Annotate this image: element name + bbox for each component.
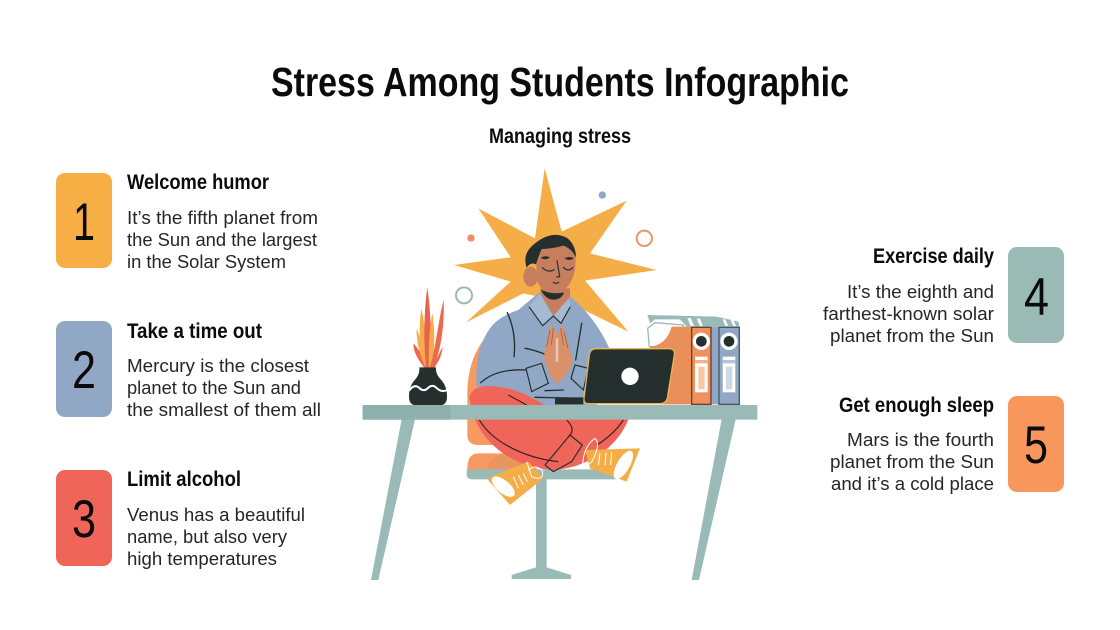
right shoe [583, 438, 640, 482]
beard [541, 290, 564, 300]
shirt lines [481, 313, 582, 398]
number card 5 [1008, 396, 1064, 492]
cuffs [526, 363, 548, 392]
laptop [555, 349, 674, 404]
plant in vase [409, 287, 447, 405]
number card 5: 5 [1024, 416, 1048, 475]
ear [523, 267, 538, 287]
head [523, 235, 576, 300]
hair [525, 235, 576, 268]
person [469, 235, 640, 505]
subtitle: Managing stress [489, 125, 631, 148]
text: take a time out: planet to the Sun and [127, 377, 301, 398]
text: limit alcohol: high temperatures [127, 548, 277, 569]
text: welcome humor: the Sun and the largest [127, 229, 317, 250]
icon: starburst [454, 168, 657, 332]
number card 2: 2 [72, 341, 96, 400]
text: exercise daily: farthest-known solar [823, 303, 994, 324]
heading: limit alcohol: Limit alcohol [127, 468, 241, 491]
panel: get enough sleep [830, 394, 1064, 494]
panel: welcome humor [56, 171, 318, 272]
title: Stress Among Students Infographic [271, 59, 849, 105]
decorative dots and rings [456, 191, 652, 303]
text: take a time out: the smallest of them all [127, 399, 321, 420]
number card 3: 3 [72, 490, 96, 549]
heading: welcome humor: Welcome humor [127, 171, 269, 194]
text: take a time out [127, 355, 321, 420]
text: welcome humor: It’s the fifth planet from [127, 207, 318, 228]
collar outline [529, 307, 570, 326]
text: get enough sleep: and it’s a cold place [831, 473, 994, 494]
text: exercise daily [823, 281, 994, 346]
text: limit alcohol: name, but also very [127, 526, 288, 547]
text: get enough sleep: planet from the Sun [830, 451, 994, 472]
neck [541, 288, 570, 317]
eyebrows [541, 256, 574, 260]
praying hands [544, 323, 573, 384]
face [535, 240, 576, 293]
chair [467, 320, 617, 579]
number card 4 [1008, 247, 1064, 343]
panel: limit alcohol [56, 468, 305, 569]
left shoe [487, 462, 543, 505]
desk [363, 405, 757, 580]
panel: exercise daily [823, 245, 1064, 346]
number card 1 [56, 173, 112, 268]
shirt [476, 292, 609, 405]
facial features [542, 261, 573, 283]
number card 4: 4 [1024, 268, 1049, 327]
folders [647, 315, 739, 404]
text: take a time out: Mercury is the closest [127, 355, 309, 376]
text: welcome humor: in the Solar System [127, 251, 286, 272]
text: welcome humor [127, 207, 318, 272]
heading: get enough sleep: Get enough sleep [839, 394, 994, 417]
text: get enough sleep [830, 429, 994, 494]
heading: exercise daily: Exercise daily [873, 245, 994, 268]
text: limit alcohol: Venus has a beautiful [127, 504, 305, 525]
text: limit alcohol [127, 504, 305, 569]
text: exercise daily: It’s the eighth and [847, 281, 994, 302]
number card 1: 1 [73, 193, 95, 252]
panel: take a time out [56, 320, 321, 420]
collar [529, 293, 570, 326]
legs [475, 419, 628, 470]
heading: take a time out: Take a time out [127, 320, 262, 343]
number card 2 [56, 321, 112, 417]
illustration: student meditating at desk [363, 168, 757, 580]
hand details [547, 328, 568, 348]
number card 3 [56, 470, 112, 566]
text: get enough sleep: Mars is the fourth [847, 429, 994, 450]
text: exercise daily: planet from the Sun [830, 325, 994, 346]
